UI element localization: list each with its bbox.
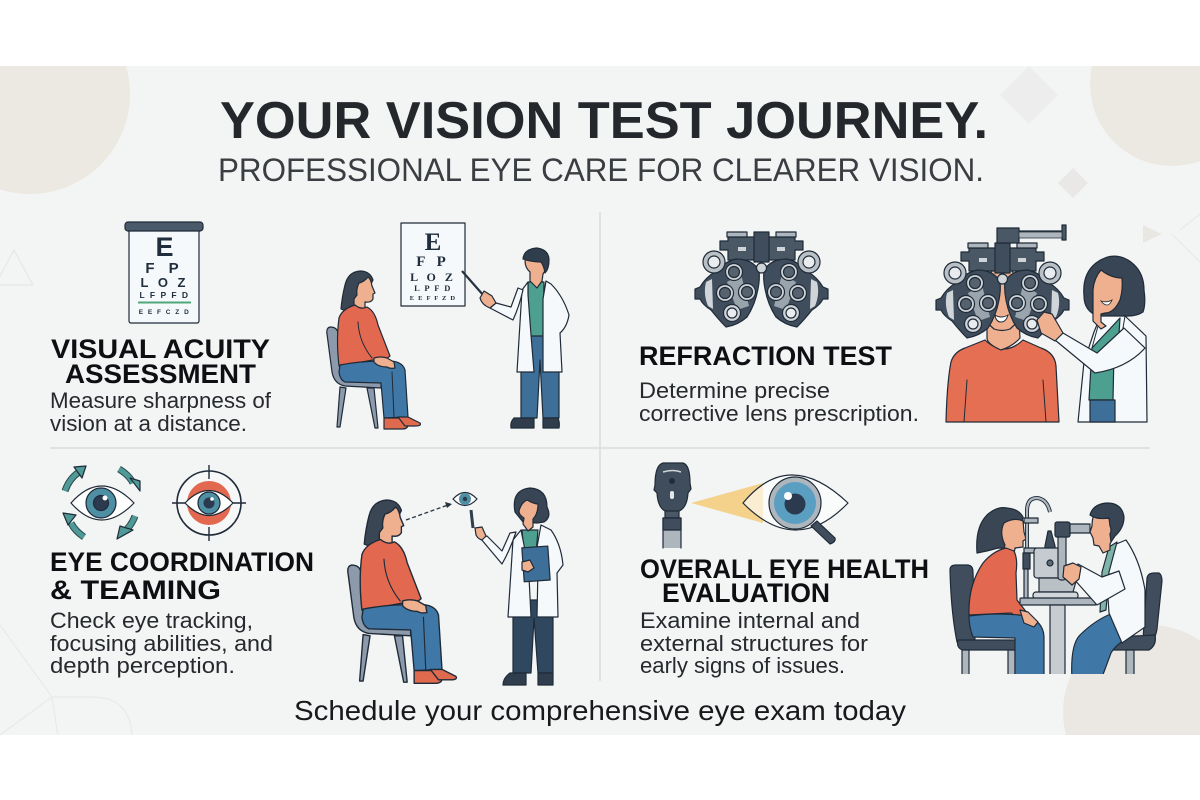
text: visual acuity description [50, 388, 272, 436]
icon: eye chart: L O Z [141, 275, 188, 290]
illustration: doctor adjusting phoropter [1037, 256, 1147, 422]
heading: visual acuity assessment: ASSESSMENT [65, 359, 257, 389]
text: eye health description: early signs of issues. [640, 653, 845, 678]
icon: small eye target [453, 492, 477, 506]
heading: eye coordination and teaming [50, 547, 314, 605]
title: YOUR VISION TEST JOURNEY. [220, 92, 988, 150]
text: eye coordination description: Check eye tracking, [50, 608, 253, 633]
text: eye health description [640, 608, 868, 678]
icon: phoropter [695, 232, 828, 327]
illustration: slit lamp examination [950, 498, 1162, 680]
text: eye health description: external structures for [640, 631, 868, 656]
doctor chair [1113, 572, 1163, 674]
icon: eye with magnifier [743, 475, 848, 544]
illustration: wall eye chart [401, 223, 465, 306]
patient chair [949, 564, 1014, 674]
heading: refraction test: REFRACTION TEST [639, 341, 893, 371]
panel: visual acuity assessment [50, 222, 569, 436]
icon: eye chart: F P [145, 260, 184, 277]
panel: overall eye health evaluation [640, 463, 1162, 680]
panel: refraction test [639, 225, 1147, 426]
panel: eye coordination and teaming [50, 465, 563, 685]
illustration: wall eye chart: F P [416, 254, 450, 270]
illustration: wall eye chart: L O Z [410, 270, 456, 284]
doctor [1063, 503, 1145, 680]
heading: overall eye health evaluation: OVERALL EYE HEALTH [640, 554, 929, 584]
text: refraction description: Determine precise [639, 378, 830, 403]
heading: overall eye health evaluation [640, 554, 929, 608]
icon: light beam [691, 483, 763, 523]
illustration: doctor pointing [462, 248, 569, 428]
illustration: wall eye chart: E E F F Z D [410, 295, 456, 302]
illustration: patient seated [327, 271, 420, 429]
illustration: wall eye chart: E [425, 229, 441, 256]
text: refraction description: corrective lens prescription. [639, 401, 919, 426]
text: eye coordination description [50, 608, 273, 678]
text: eye health description: Examine internal and [640, 608, 860, 633]
subtitle: PROFESSIONAL EYE CARE FOR CLEARER VISION. [218, 152, 984, 188]
heading: eye coordination and teaming: & TEAMING [50, 575, 221, 605]
heading: visual acuity assessment: VISUAL ACUITY [51, 334, 270, 364]
icon: ophthalmoscope [654, 463, 691, 548]
icon: eye chart: E [155, 232, 174, 262]
dividers [50, 212, 1150, 681]
illustration: seated patient tracking [348, 500, 456, 683]
heading: visual acuity assessment [51, 334, 270, 389]
illustration: doctor with pen and clipboard [471, 488, 563, 685]
text: visual acuity description: vision at a distance. [50, 411, 247, 436]
text: refraction description [639, 378, 919, 426]
call to action: Schedule your comprehensive eye exam today [294, 695, 906, 726]
icon: eye with rotation arrows [63, 466, 140, 539]
icon: eye target [172, 465, 246, 541]
illustration: patient at phoropter [936, 225, 1069, 422]
icon: eye chart [125, 222, 203, 323]
text: eye coordination description: depth perception. [50, 653, 235, 678]
arrow: gaze direction [406, 502, 452, 520]
icon: eye chart: L F P F D [139, 290, 190, 300]
text: visual acuity description: Measure sharpness of [50, 388, 272, 413]
heading: eye coordination and teaming: EYE COORDINATION [50, 547, 314, 577]
illustration: wall eye chart: L P F D [414, 283, 452, 293]
patient [969, 508, 1044, 680]
text: eye coordination description: focusing abilities, and [50, 631, 273, 656]
heading: overall eye health evaluation: EVALUATION [662, 578, 830, 608]
icon: eye chart: E E F C Z D [139, 309, 190, 316]
slit lamp [1020, 498, 1096, 680]
